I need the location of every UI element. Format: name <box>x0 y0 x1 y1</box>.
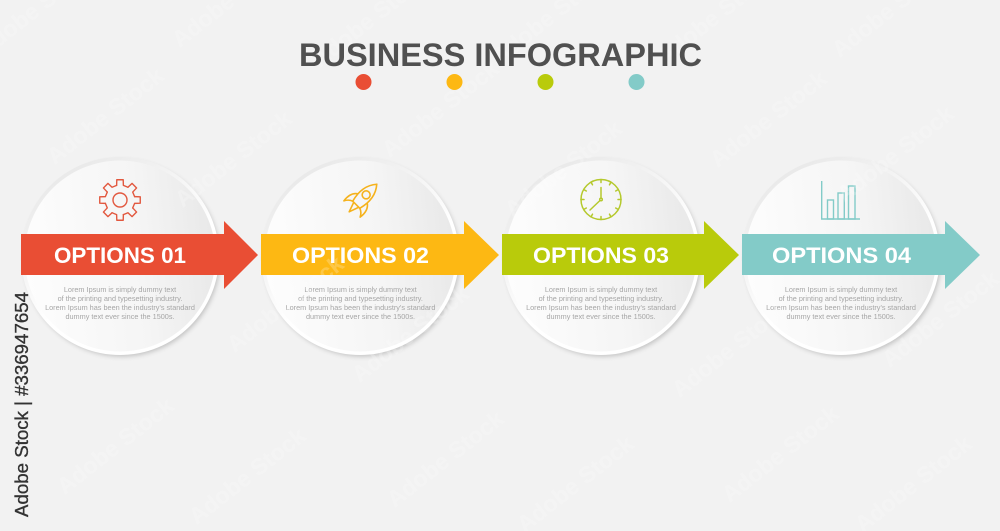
colored title dots <box>356 74 644 90</box>
heading: options 02: OPTIONS 02 <box>292 243 429 268</box>
watermark pattern: Adobe Stock <box>832 100 959 207</box>
arrow: options 03 <box>502 221 739 289</box>
text block: options 04: dummy text ever since the 1500s. <box>786 312 896 321</box>
icon: clock <box>581 180 621 220</box>
watermark pattern: Adobe Stock <box>382 405 509 512</box>
text block: options 02: of the printing and typesetting industry. <box>298 294 423 303</box>
text block: options 02 <box>286 285 435 321</box>
icon: rocket <box>341 176 385 220</box>
icon: gear <box>100 180 140 220</box>
watermark pattern: Adobe Stock <box>500 115 627 222</box>
watermark pattern: Adobe Stock <box>347 280 474 387</box>
watermark pattern: Adobe Stock <box>52 392 179 499</box>
text block: options 01: of the printing and typesetting industry. <box>58 294 182 303</box>
watermark pattern: Adobe Stock <box>222 250 349 357</box>
heading: options 04: OPTIONS 04 <box>772 243 912 268</box>
arrow: options 01 <box>21 221 258 289</box>
watermark pattern: Adobe Stock <box>877 265 1000 372</box>
text block: options 04: of the printing and typesetting industry. <box>779 294 903 303</box>
panel: options 01 <box>21 157 258 356</box>
panel: options 02 <box>261 157 499 356</box>
text block: options 01: Lorem Ipsum has been the industry's standard <box>45 303 195 312</box>
text block: options 03: Lorem Ipsum is simply dummy text <box>545 285 657 294</box>
text block: options 03: of the printing and typesetting industry. <box>539 294 663 303</box>
watermark pattern: Adobe Stock <box>170 105 297 212</box>
icon: bar chart <box>822 181 860 219</box>
text block: options 03: Lorem Ipsum has been the industry's standard <box>526 303 676 312</box>
panel: options 03 <box>502 157 739 356</box>
text block: options 03 <box>526 285 676 321</box>
watermark pattern: Adobe Stock <box>705 65 832 172</box>
text block: options 01: dummy text ever since the 1500s. <box>65 312 175 321</box>
arrow: options 02 <box>261 221 499 289</box>
title: BUSINESS INFOGRAPHIC <box>299 37 702 73</box>
panel: options 04 <box>742 157 980 356</box>
text block: options 03: dummy text ever since the 1500s. <box>546 312 656 321</box>
text block: options 04: Lorem Ipsum has been the industry's standard <box>766 303 916 312</box>
text block: options 02: dummy text ever since the 1500s. <box>306 312 415 321</box>
arrow: options 04 <box>742 221 980 289</box>
watermark pattern: Adobe Stock <box>717 400 844 507</box>
stock id side label: Adobe Stock | #336947654 <box>12 292 32 517</box>
text block: options 04 <box>766 285 916 321</box>
watermark pattern: Adobe Stock <box>184 422 311 529</box>
text block: options 04: Lorem Ipsum is simply dummy text <box>785 285 897 294</box>
heading: options 01: OPTIONS 01 <box>54 243 186 268</box>
text block: options 02: Lorem Ipsum has been the industry's standard <box>286 303 435 312</box>
watermark pattern: Adobe Stock <box>42 62 169 169</box>
text block: options 01: Lorem Ipsum is simply dummy text <box>64 285 176 294</box>
watermark pattern: Adobe Stock <box>667 295 794 402</box>
text block: options 02: Lorem Ipsum is simply dummy text <box>304 285 417 294</box>
heading: options 03: OPTIONS 03 <box>533 243 669 268</box>
watermark pattern: Adobe Stock <box>377 55 504 162</box>
text block: options 01 <box>45 285 195 321</box>
